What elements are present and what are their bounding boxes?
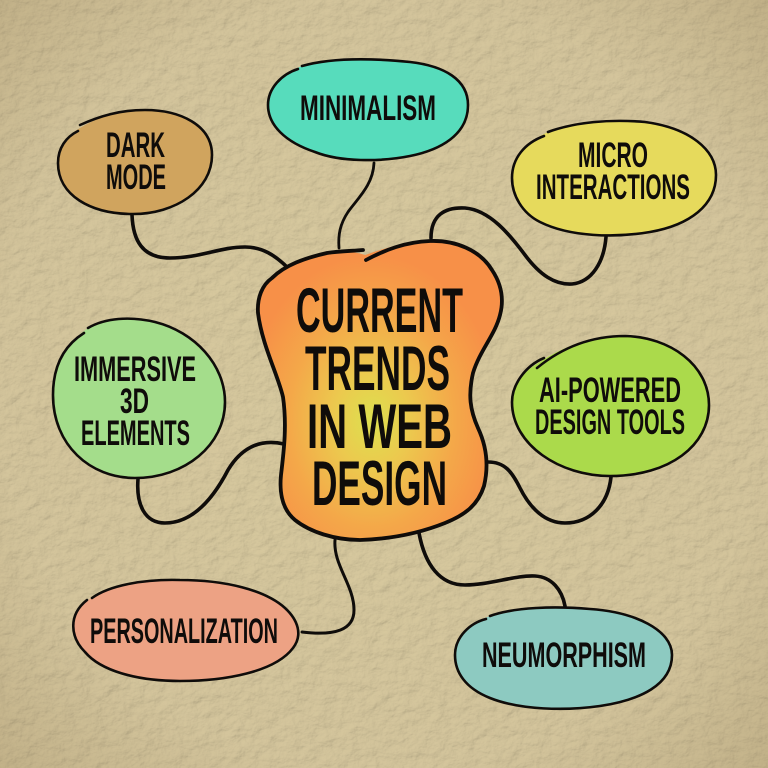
connector: AI tools (488, 462, 611, 523)
node: dark mode (58, 110, 212, 214)
connector: neumorphism (419, 533, 565, 606)
connector: immersive 3D (138, 442, 284, 523)
node: minimalism: MINIMALISM (300, 89, 436, 128)
connector: minimalism (339, 163, 374, 248)
central node: current trends in web design: IN WEB (307, 392, 452, 462)
node: personalization: PERSONALIZATION (90, 612, 278, 651)
node: neumorphism (455, 607, 672, 709)
node: neumorphism: NEUMORPHISM (482, 636, 646, 675)
node: minimalism (268, 59, 468, 160)
central node: current trends in web design (258, 241, 502, 540)
node: dark mode: DARK (106, 126, 165, 165)
node: personalization (73, 580, 298, 681)
central node: current trends in web design: DESIGN (312, 449, 447, 519)
node: micro interactions (512, 121, 716, 235)
connector: dark mode (132, 215, 288, 268)
node: immersive 3D elements: ELEMENTS (81, 414, 190, 453)
node: AI-powered design tools: AI-POWERED (539, 371, 681, 410)
node: dark mode: MODE (106, 158, 166, 197)
node: immersive 3D elements (53, 319, 225, 478)
node: immersive 3D elements: 3D (120, 382, 149, 421)
central node: current trends in web design: TRENDS (305, 334, 450, 404)
node: micro interactions: MICRO (578, 136, 648, 175)
node: AI-powered design tools (512, 336, 709, 476)
central node: current trends in web design: CURRENT (296, 276, 463, 346)
node: immersive 3D elements: IMMERSIVE (74, 350, 196, 389)
connector: micro interactions (431, 208, 606, 284)
connector: personalization (302, 540, 354, 633)
